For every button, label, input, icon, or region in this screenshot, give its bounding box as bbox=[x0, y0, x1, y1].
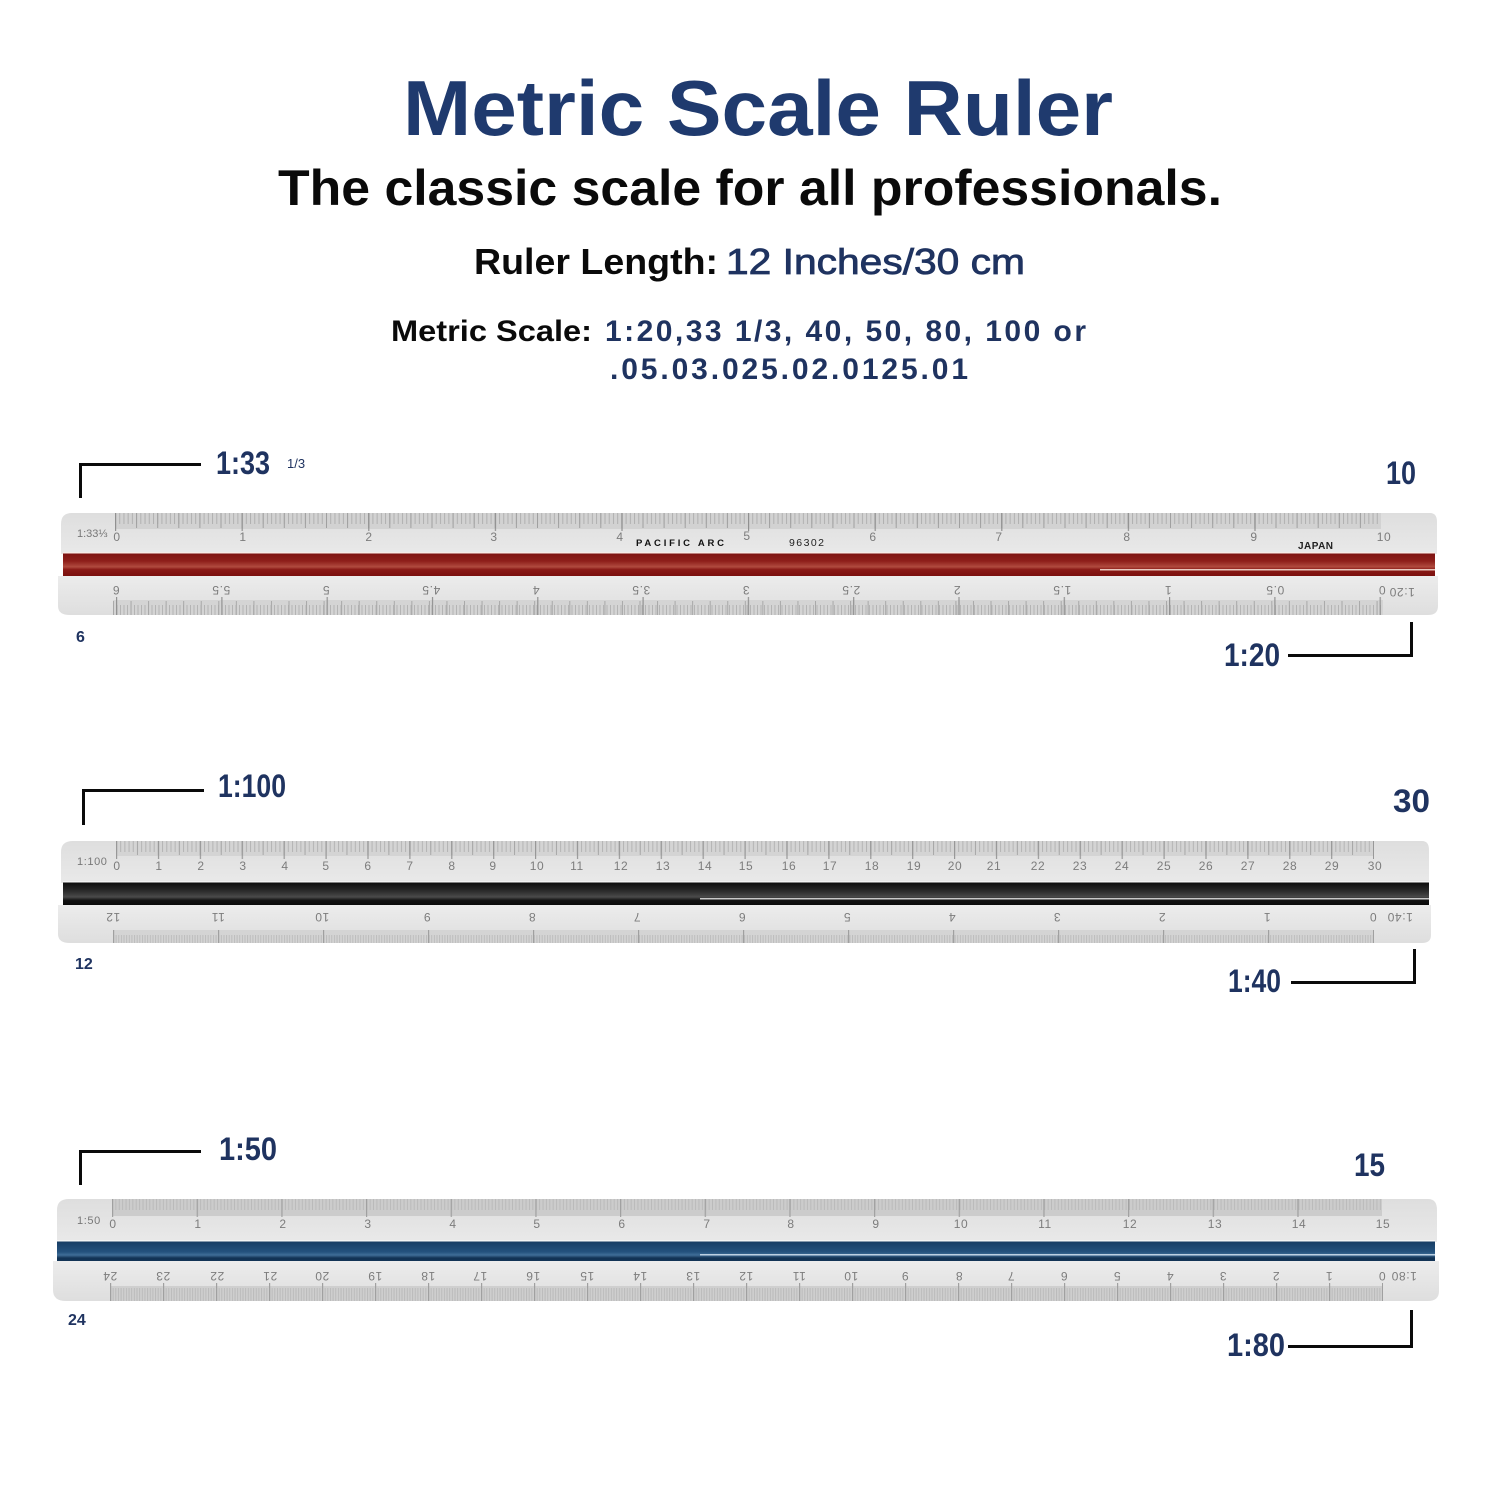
ruler 3: blue: 8 bbox=[787, 1217, 795, 1231]
ruler 2: black: 3 bbox=[1053, 910, 1061, 924]
title: Metric Scale Ruler bbox=[403, 64, 1113, 152]
ruler 3: blue: 1 bbox=[194, 1217, 202, 1231]
ruler 1: red: 4 bbox=[532, 583, 540, 597]
ruler 1: red: 7 bbox=[995, 530, 1003, 544]
ruler 1: red: 3 bbox=[742, 583, 750, 597]
ruler 2: black: 6 bbox=[364, 859, 372, 873]
callout: 1:80: 1:80 bbox=[1227, 1327, 1285, 1363]
ruler 3: blue: 8 bbox=[955, 1269, 963, 1283]
ruler 2: black: 12 bbox=[614, 859, 628, 873]
ruler 3: blue: 20 bbox=[315, 1269, 329, 1283]
ruler 2: black: 0 bbox=[1369, 910, 1377, 924]
ruler 2: black: 29 bbox=[1325, 859, 1339, 873]
ruler 1: red: 0.5 bbox=[1266, 583, 1284, 597]
ruler 3: blue: 21 bbox=[263, 1269, 277, 1283]
ruler 2: black: 4 bbox=[948, 910, 956, 924]
ruler 1: red: 1:33⅓ bbox=[77, 528, 108, 540]
ruler 2: black: 8 bbox=[528, 910, 536, 924]
ruler 3: blue: 2 bbox=[279, 1217, 287, 1231]
ruler 3: blue: 1:80 bbox=[1391, 1269, 1417, 1283]
ruler 2: black: 20 bbox=[948, 859, 962, 873]
ruler 2: black: 9 bbox=[423, 910, 431, 924]
callout: 1:50: 1:50 bbox=[219, 1131, 277, 1167]
ruler 1: red: 2 bbox=[365, 530, 373, 544]
callout: 1:20 bbox=[1224, 622, 1412, 673]
callout: 1:50 bbox=[80, 1131, 277, 1185]
ruler 2: black: 18 bbox=[865, 859, 879, 873]
ruler 2: black: 9 bbox=[489, 859, 497, 873]
ruler 1: red bbox=[58, 513, 1438, 615]
ruler 3: blue: 0 bbox=[1378, 1269, 1386, 1283]
ruler 1: red: PACIFIC ARC bbox=[636, 538, 724, 549]
ruler 3: blue: 18 bbox=[421, 1269, 435, 1283]
ruler 1: red: 5.5 bbox=[212, 583, 230, 597]
ruler 2: black: 11 bbox=[211, 910, 225, 924]
ruler 3: blue: 2 bbox=[1272, 1269, 1280, 1283]
ruler 2: black: 6 bbox=[738, 910, 746, 924]
ruler 3: blue: 9 bbox=[901, 1269, 909, 1283]
ruler 2: black: 1:40 bbox=[1387, 910, 1413, 924]
ruler 3: blue: 16 bbox=[526, 1269, 540, 1283]
ruler 3: blue: 22 bbox=[210, 1269, 224, 1283]
ruler 2: black: 10 bbox=[530, 859, 544, 873]
ruler 1: red: 10 bbox=[1377, 530, 1391, 544]
ruler 3: blue: 6 bbox=[618, 1217, 626, 1231]
ruler 1: red: 1.5 bbox=[1053, 583, 1071, 597]
ruler 2: black: 15 bbox=[739, 859, 753, 873]
ruler length line bbox=[474, 241, 1025, 282]
ruler 1: red: 5 bbox=[322, 583, 330, 597]
callout: 1:33 1/3 bbox=[80, 445, 305, 498]
ruler 2: black: 21 bbox=[987, 859, 1001, 873]
ruler 3: blue: 0 bbox=[109, 1217, 117, 1231]
ruler 2: black: 13 bbox=[656, 859, 670, 873]
ruler 3: blue: 13 bbox=[686, 1269, 700, 1283]
ruler 3: blue: 13 bbox=[1208, 1217, 1222, 1231]
callout: 1:100: 1:100 bbox=[218, 768, 286, 804]
ruler 3: blue: 3 bbox=[364, 1217, 372, 1231]
ruler 2: black: 23 bbox=[1073, 859, 1087, 873]
ruler 2: black: 14 bbox=[698, 859, 712, 873]
ruler 2: black: 11 bbox=[570, 859, 584, 873]
ruler 1: red: 0 bbox=[113, 530, 121, 544]
ruler 1: red: 6 bbox=[869, 530, 877, 544]
ruler 3: blue: 11 bbox=[792, 1269, 806, 1283]
ruler 2: black: 1 bbox=[155, 859, 163, 873]
metric scale text block: .05.03.025.02.0125.01 bbox=[610, 353, 968, 386]
ruler 3: blue: 14 bbox=[633, 1269, 647, 1283]
ruler 2: black: 27 bbox=[1241, 859, 1255, 873]
ruler 3: blue: 15 bbox=[580, 1269, 594, 1283]
metric scale text block: 1:20,33 1/3, 40, 50, 80, 100 or bbox=[605, 315, 1086, 348]
label: 6: 6 bbox=[76, 629, 85, 646]
ruler 1: red: 4 bbox=[616, 530, 624, 544]
ruler 2: black: 25 bbox=[1157, 859, 1171, 873]
ruler 3: blue: 5 bbox=[533, 1217, 541, 1231]
ruler 3: blue: 9 bbox=[872, 1217, 880, 1231]
ruler 2: black: 24 bbox=[1115, 859, 1129, 873]
ruler 1: red: 8 bbox=[1123, 530, 1131, 544]
callout: 1:100 bbox=[84, 768, 286, 825]
ruler 3: blue: 12 bbox=[739, 1269, 753, 1283]
ruler length line: 12 Inches/30 cm bbox=[726, 241, 1025, 282]
callout: 1:33 1/3: 1/3 bbox=[287, 456, 305, 471]
ruler 2: black: 0 bbox=[113, 859, 121, 873]
ruler 3: blue: 10 bbox=[954, 1217, 968, 1231]
ruler 3: blue: 4 bbox=[1166, 1269, 1174, 1283]
ruler 2: black: 19 bbox=[907, 859, 921, 873]
metric scale text block bbox=[391, 315, 1086, 386]
ruler 3: blue: 5 bbox=[1113, 1269, 1121, 1283]
ruler 1: red: 1:20 bbox=[1389, 585, 1415, 599]
ruler 2: black: 5 bbox=[322, 859, 330, 873]
ruler 3: blue bbox=[53, 1199, 1439, 1301]
ruler 1: red: 1 bbox=[1164, 583, 1172, 597]
ruler 3: blue: 1:50 bbox=[77, 1215, 101, 1227]
metric scale text block: Metric Scale: bbox=[391, 315, 592, 348]
ruler 1: red: 1 bbox=[239, 530, 247, 544]
ruler 1: red: 9 bbox=[1250, 530, 1258, 544]
callout: 1:40 bbox=[1228, 949, 1414, 999]
callout: 30: 30 bbox=[1393, 783, 1430, 819]
subtitle: The classic scale for all professionals. bbox=[278, 160, 1222, 216]
ruler 3: blue: 12 bbox=[1123, 1217, 1137, 1231]
ruler 3: blue: 11 bbox=[1038, 1217, 1052, 1231]
ruler 1: red: 0 bbox=[1378, 583, 1386, 597]
ruler 1: red: 2 bbox=[953, 583, 961, 597]
ruler 2: black: 16 bbox=[782, 859, 796, 873]
ruler 1: red: 2.5 bbox=[842, 583, 860, 597]
ruler 2: black: 30 bbox=[1368, 859, 1382, 873]
ruler 3: blue: 1 bbox=[1325, 1269, 1333, 1283]
ruler 2: black: 22 bbox=[1031, 859, 1045, 873]
ruler 2: black: 1:100 bbox=[77, 856, 108, 868]
ruler 2: black: 1 bbox=[1263, 910, 1271, 924]
ruler 2: black: 8 bbox=[448, 859, 456, 873]
label: 24: 24 bbox=[68, 1312, 86, 1329]
ruler 3: blue: 19 bbox=[368, 1269, 382, 1283]
ruler 3: blue: 10 bbox=[844, 1269, 858, 1283]
ruler 3: blue: 14 bbox=[1292, 1217, 1306, 1231]
ruler 2: black: 26 bbox=[1199, 859, 1213, 873]
ruler 2: black: 7 bbox=[406, 859, 414, 873]
ruler 2: black: 5 bbox=[843, 910, 851, 924]
ruler 3: blue: 6 bbox=[1060, 1269, 1068, 1283]
ruler 2: black: 4 bbox=[281, 859, 289, 873]
ruler length line: Ruler Length: bbox=[474, 241, 718, 282]
ruler 2: black: 28 bbox=[1283, 859, 1297, 873]
ruler 2: black: 2 bbox=[197, 859, 205, 873]
ruler 2: black: 17 bbox=[823, 859, 837, 873]
ruler 3: blue: 15 bbox=[1376, 1217, 1390, 1231]
ruler 3: blue: 7 bbox=[1007, 1269, 1015, 1283]
ruler 1: red: 5 bbox=[743, 529, 751, 543]
ruler 3: blue: 3 bbox=[1219, 1269, 1227, 1283]
ruler 1: red: 6 bbox=[112, 583, 120, 597]
ruler 2: black: 12 bbox=[106, 910, 120, 924]
callout: 1:20: 1:20 bbox=[1224, 637, 1280, 673]
ruler 3: blue: 4 bbox=[449, 1217, 457, 1231]
callout: 1:80 bbox=[1227, 1310, 1412, 1363]
ruler 1: red: 3 bbox=[490, 530, 498, 544]
callout: 15: 15 bbox=[1354, 1147, 1385, 1183]
ruler 2: black: 3 bbox=[239, 859, 247, 873]
ruler 2: black: 2 bbox=[1158, 910, 1166, 924]
callout: 10: 10 bbox=[1386, 455, 1416, 491]
ruler 3: blue: 17 bbox=[473, 1269, 487, 1283]
ruler 2: black bbox=[58, 841, 1431, 943]
label: 12: 12 bbox=[75, 956, 93, 973]
ruler 2: black: 7 bbox=[633, 910, 641, 924]
ruler 1: red: 3.5 bbox=[632, 583, 650, 597]
callout: 1:40: 1:40 bbox=[1228, 963, 1281, 999]
ruler 1: red: 4.5 bbox=[422, 583, 440, 597]
ruler 3: blue: 24 bbox=[103, 1269, 117, 1283]
ruler 3: blue: 7 bbox=[703, 1217, 711, 1231]
callout: 1:33 1/3: 1:33 bbox=[216, 445, 270, 481]
ruler 3: blue: 23 bbox=[156, 1269, 170, 1283]
ruler 1: red: 96302 bbox=[789, 537, 824, 549]
ruler 2: black: 10 bbox=[315, 910, 329, 924]
ruler 1: red: JAPAN bbox=[1298, 541, 1333, 552]
